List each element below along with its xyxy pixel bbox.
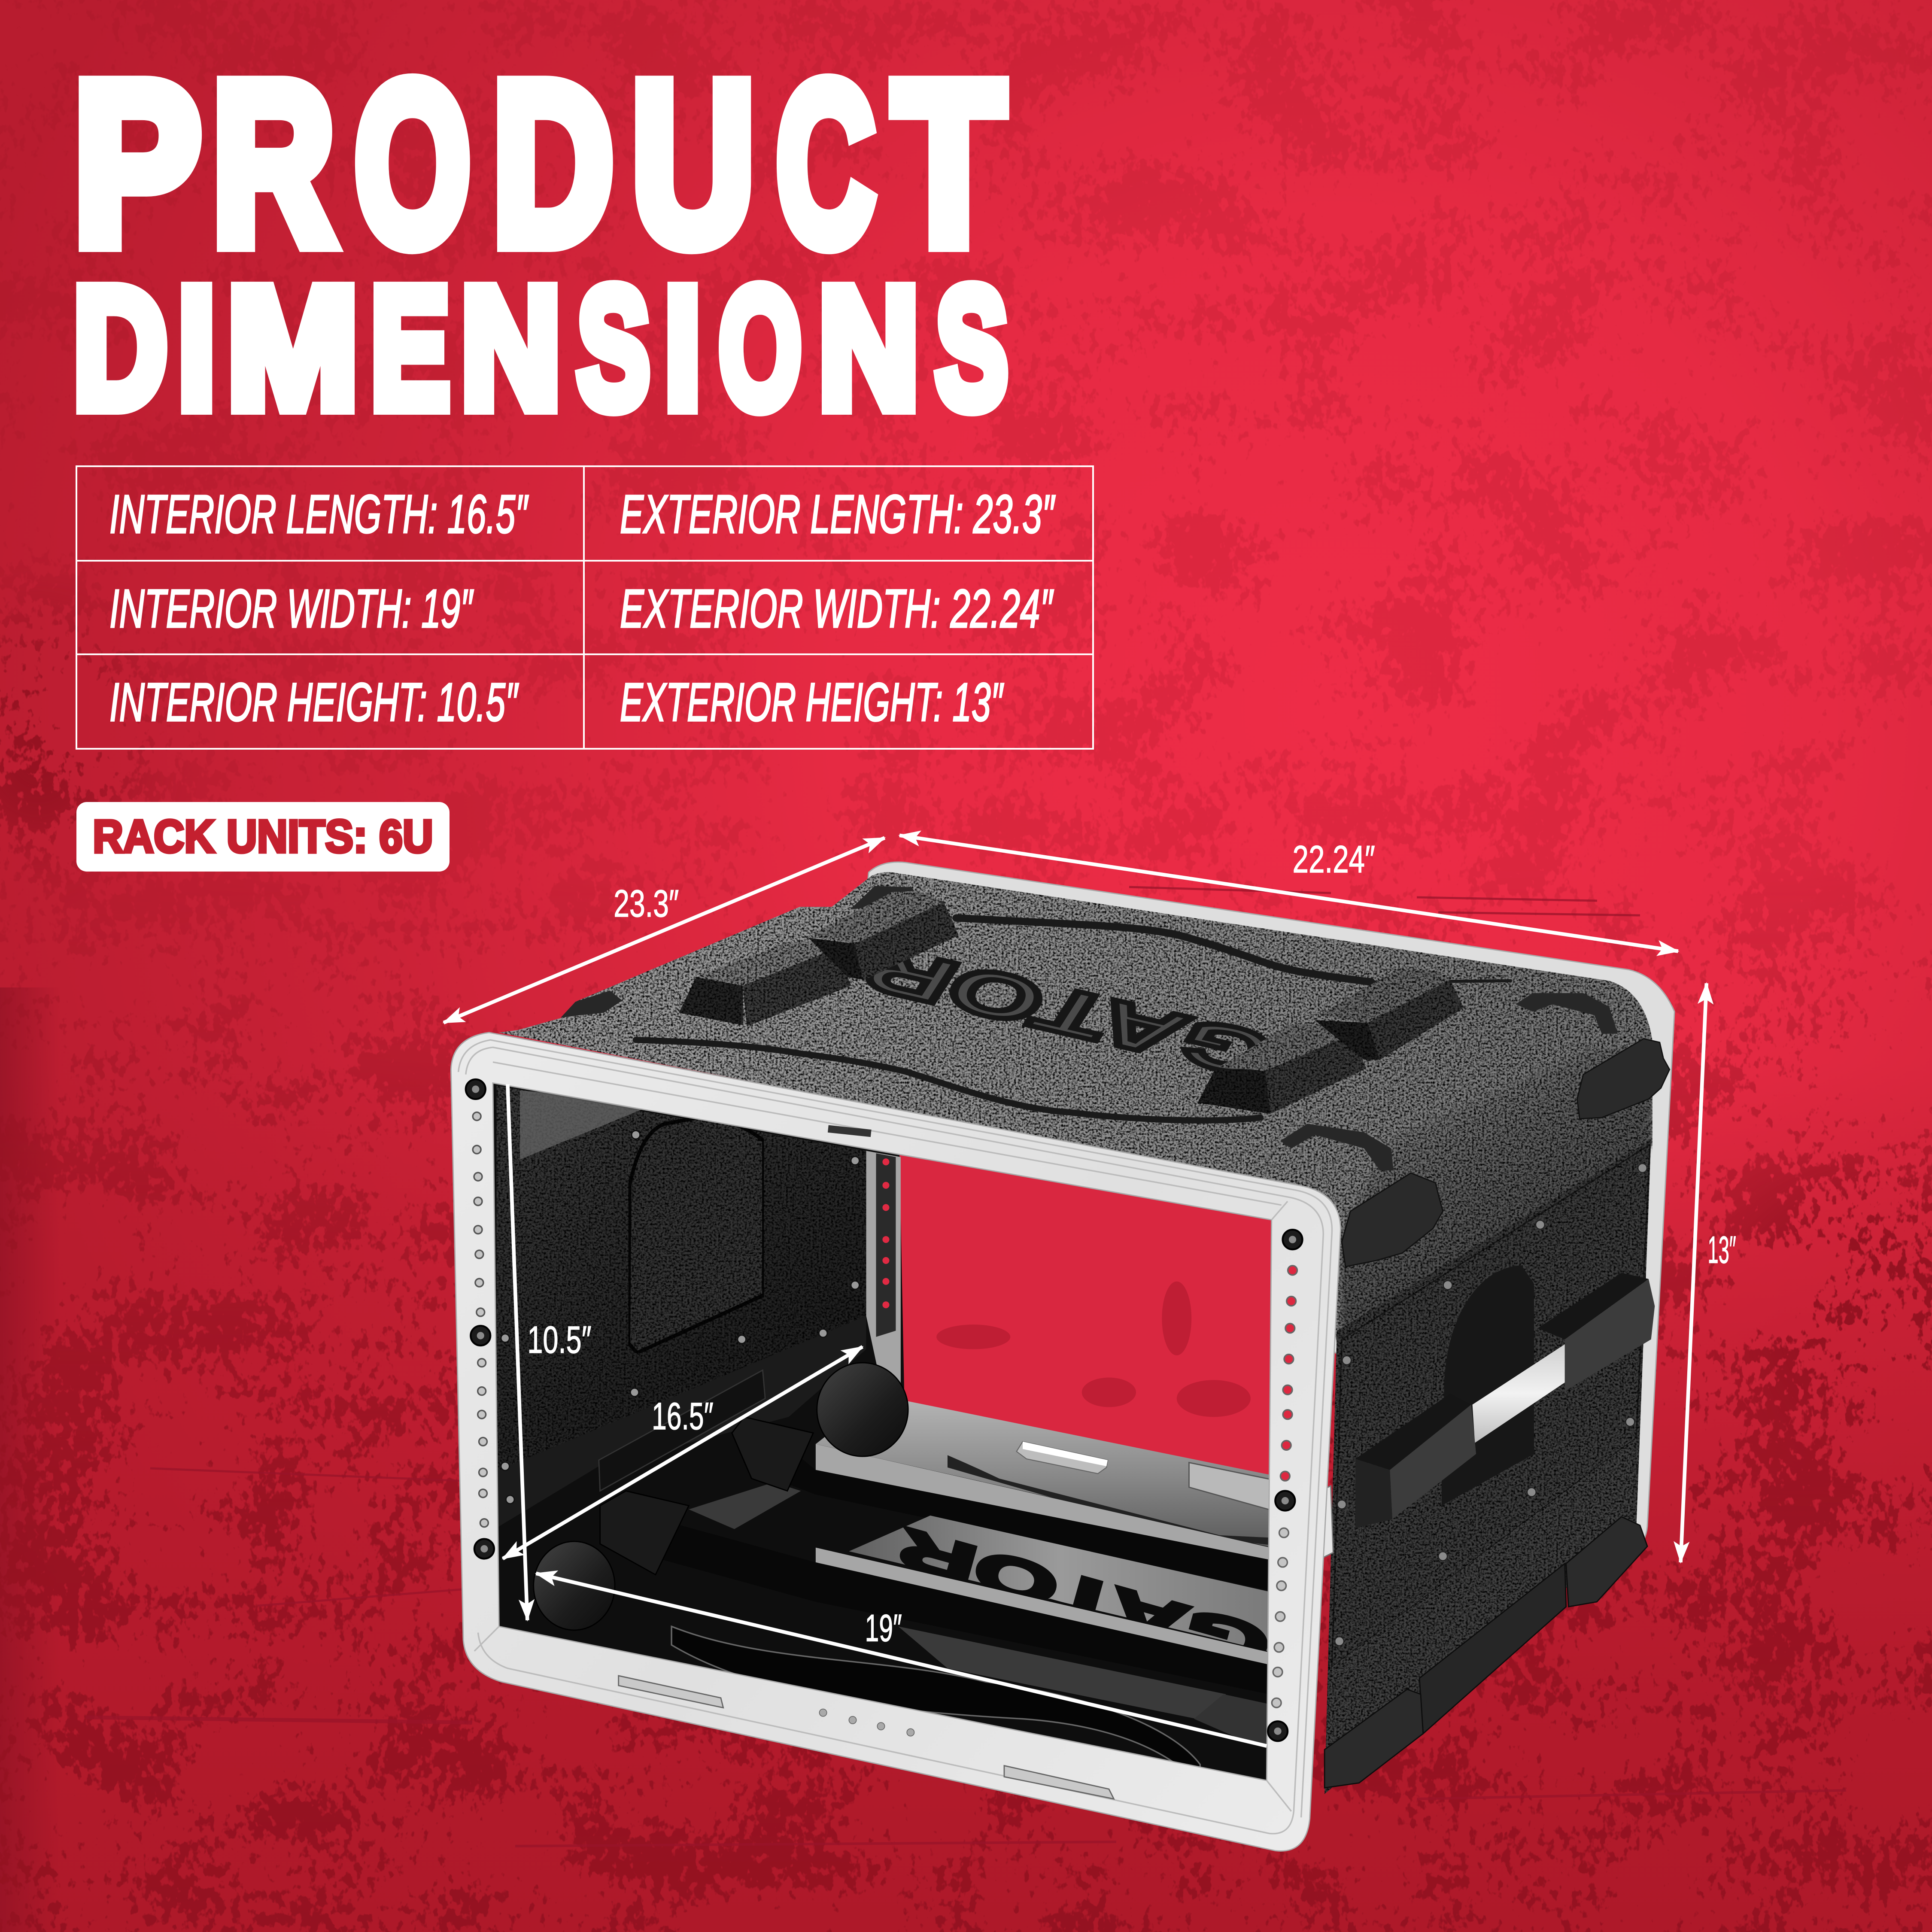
bottom frame hinges [619,1676,1114,1799]
rear lower panel [816,1400,1276,1548]
case side face [1324,1047,1653,1794]
rear floor wave [948,1455,1272,1545]
dimensions table: INTERIOR WIDTH: 19″ [109,578,474,639]
floor block [1194,1694,1269,1747]
rear column red holes [882,1158,889,1308]
title line 1: R [213,35,334,291]
top frame slot [828,1125,872,1137]
title line 1: D [493,35,613,291]
right grip [1538,1273,1655,1391]
embossed wave recess [636,918,1510,1121]
rubber feet [534,1363,908,1630]
title line 2: M [228,253,358,444]
floor GATOR emboss: GATOR [892,1516,1276,1677]
title line 2 [73,253,1008,444]
rear aluminium frame [863,862,1674,1555]
side shoulder [1340,1047,1653,1340]
dimension labels: 10.5″ [527,1318,592,1361]
rear hinge [1189,1463,1273,1510]
title line 2: S [577,253,650,444]
dimensions table: EXTERIOR WIDTH: 22.24″ [620,578,1054,639]
title line 1: T [894,35,1004,291]
title line 2: D [73,253,167,444]
frame edge highlights [459,1040,1332,1834]
case lid [499,872,1653,1343]
side panel screws [1335,1163,1647,1646]
floor emboss band [849,1516,1270,1651]
title line 2: O [719,253,801,444]
rear latch [1017,1442,1108,1473]
rail screw heads [472,1085,1296,1735]
background: scratches [86,887,1846,1846]
bottom rail and latches [1324,1517,1647,1788]
wall bump [629,1116,764,1353]
dimension labels: 16.5″ [652,1394,714,1437]
rack units badge [76,802,450,872]
dimensions table: EXTERIOR HEIGHT: 13″ [620,672,1004,732]
dimension labels: 13″ [1708,1228,1736,1271]
rack units badge: RACK UNITS: 6U [93,810,433,862]
dimensions table: INTERIOR HEIGHT: 10.5″ [109,672,519,732]
dimension labels: 19″ [865,1607,902,1649]
dimensions table: INTERIOR LENGTH: 16.5″ [109,484,529,544]
floor glare [898,1626,1226,1719]
case interior [493,1083,1283,1801]
upper rail [790,1449,1270,1591]
lower rail [663,1520,1269,1694]
wall bracket [599,1370,765,1491]
side handle grips [1355,1273,1655,1528]
title line 2: I [665,253,701,444]
embossed GATOR logo on lid: GATOR [863,931,1281,1094]
interior wall panel [497,1085,866,1473]
dimension labels [527,838,1736,1649]
title line 1: U [632,35,754,291]
bottom frame dots [819,1709,914,1736]
title line 2: N [461,253,561,444]
rear rack strip [876,1153,896,1337]
dimension labels: 22.24″ [1293,838,1375,881]
red window through rear [899,1154,1282,1485]
lid handle D [1315,969,1464,1060]
dimension arrows [444,835,1707,1746]
rail end blocks [600,1417,813,1575]
title line 2: S [936,253,1008,444]
lid corner notches [561,886,1618,1170]
side handle recess [1442,1265,1534,1506]
title line 2: E [371,253,450,444]
rack case product illustration [444,835,1736,1851]
wall lower band [497,1316,866,1528]
lid handle A [679,942,851,1027]
title line 1: P [74,35,200,291]
lower rail top strip [816,1548,1269,1665]
floor wave [671,1626,1200,1786]
wall screws [501,1130,859,1504]
rail screws [466,1079,1302,1741]
title line 1 [74,35,1004,291]
grunge on red window [936,1282,1251,1417]
right rail holes [1272,1266,1297,1707]
title line 1: O [355,35,470,291]
lid handle C [1198,1024,1367,1114]
side latch clasp [1320,1486,1333,1558]
upper rail top strip [816,1444,1270,1560]
side latches [1342,1039,1670,1267]
side lower body [1324,1140,1651,1794]
lid handle B [808,891,959,981]
background: dark left edge [0,987,60,1932]
title line 2: I [178,253,215,444]
mid floor glare [689,1482,801,1529]
left rail holes [473,1112,488,1527]
rear rack column [866,1151,901,1405]
dimension labels: 23.3″ [614,882,679,925]
aluminium front frame [451,1033,1340,1851]
title line 1: C [777,35,875,291]
side lower strip [1324,1438,1636,1774]
lid grip handles [679,891,1464,1114]
side panel [1332,1145,1650,1667]
left grip [1355,1394,1476,1528]
dimensions table: EXTERIOR LENGTH: 23.3″ [620,484,1056,544]
title [73,35,1008,444]
dimensions table [76,466,1093,749]
title line 2: N [819,253,919,444]
aluminium handle bar [1473,1344,1565,1443]
wall top glare [520,1091,643,1160]
